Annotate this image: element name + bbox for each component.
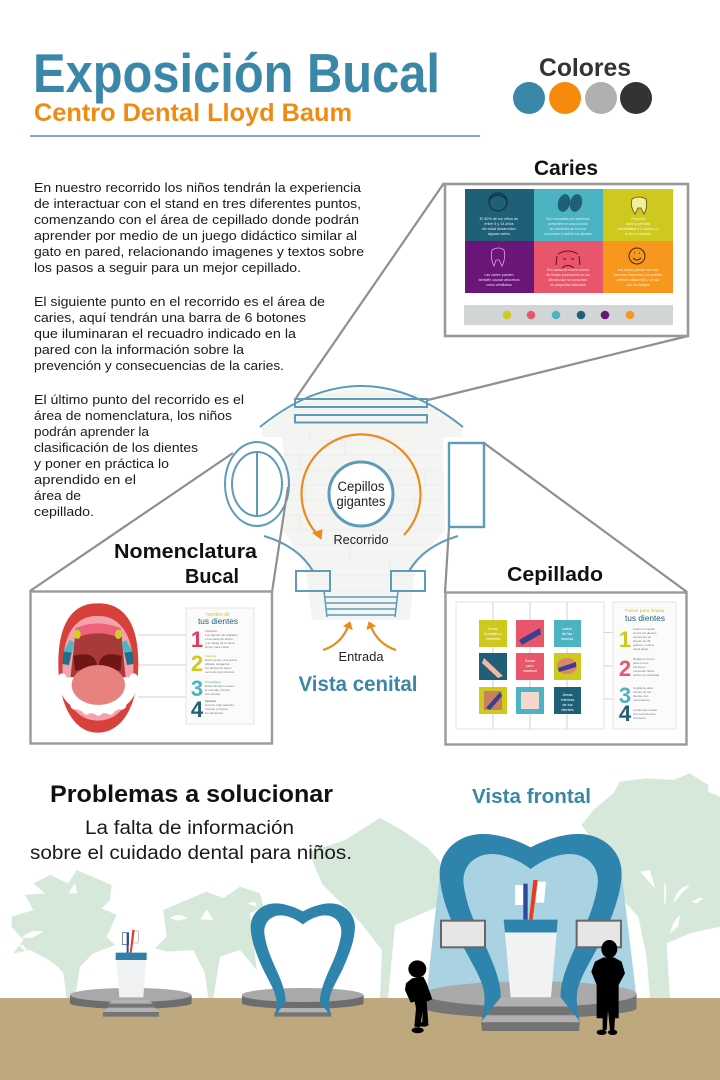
caries card: pink: [534, 241, 603, 293]
text: problema: [30, 818, 352, 864]
caries card: yellow: lo frío o caliente: [625, 232, 651, 236]
card: pasos para limpiar tus dientes: inferiores: [633, 665, 646, 669]
game board: Áreas: [488, 627, 498, 631]
card: pasos para limpiar tus dientes: 2: [619, 656, 631, 681]
caries card: pink: de fiestas provocando en los: [546, 273, 590, 277]
arrows: entrada: [323, 622, 396, 650]
stage 3: frontal tooth stand: [405, 834, 637, 1035]
card: tus dientes: y de abajo de la boca: [205, 641, 235, 645]
card: pasos para limpiar tus dientes: 3: [619, 683, 631, 708]
toothbrushes: [515, 880, 546, 920]
game board: Áreas: [563, 693, 573, 697]
intro text: El siguiente punto en el recorrido es el área de: [34, 294, 325, 309]
card: tus dientes: Caninos: [205, 654, 217, 658]
game board: Áreas: [525, 659, 535, 663]
card: tus dientes: Incisivos: [205, 629, 217, 633]
card: tus dientes: los alimentos duros: [205, 666, 232, 670]
card: pasos para limpiar tus dientes: arriba con suavidad: [633, 673, 660, 677]
floor plan: vista cenital: [225, 386, 484, 696]
intro text: área de: [34, 488, 81, 503]
caries card: teal: [534, 189, 603, 241]
ground: [0, 998, 720, 1080]
blue tooth arch: [440, 834, 622, 1022]
heading: problemas a solucionar: Problemas a solucionar: [50, 781, 333, 808]
label: entrada: Entrada: [338, 649, 384, 664]
heading: nomenclatura bucal: [114, 540, 258, 588]
text: problema: sobre el cuidado dental para niños.: [30, 843, 352, 864]
heading: nomenclatura bucal: Bucal: [185, 565, 239, 588]
card: pasos para limpiar tus dientes: interior de los: [633, 690, 652, 694]
intro text: aprender por medio de un juego didáctico similar al: [34, 228, 357, 243]
card: pasos para limpiar tus dientes: dientes con: [633, 694, 649, 698]
card: tus dientes: dos puntas: [205, 692, 221, 696]
card: tus dientes: Estos tienen una punta: [205, 658, 237, 662]
card: tus dientes: Molares: [205, 699, 216, 703]
colour palette: [513, 54, 652, 114]
card: tus dientes: 1: [191, 627, 203, 652]
game board: masticar: [523, 669, 538, 673]
card: tus dientes: afilada, desgarran: [205, 662, 230, 666]
intro text: pared con la información sobre la: [34, 342, 245, 357]
caries card: yellow: dolor y pérdida: [626, 222, 650, 226]
caries card: orange: [603, 241, 673, 293]
steps: [481, 997, 580, 1031]
caries card: purple: [465, 241, 534, 293]
card: pasos para limpiar tus dientes: contra los dientes: [633, 631, 657, 635]
caries card: teal: Son causadas por bacterias: [546, 217, 590, 221]
game board: [456, 602, 613, 729]
connectors: [138, 635, 186, 697]
central giant brushes circle: gigantes: [336, 494, 386, 509]
intro text: que iluminaran el recuadro indicado en la: [34, 326, 297, 341]
card: tus dientes: cerca de los incisivos: [205, 670, 235, 674]
intro text: El último punto del recorrido es el: [34, 392, 244, 407]
intro text: [34, 180, 364, 519]
card: pasos para limpiar tus dientes: paso en los: [633, 661, 649, 665]
stage 2: tooth arch on platform: [242, 903, 364, 1017]
heading: cepillado: Cepillado: [507, 563, 603, 586]
card: tus dientes: sirven para cortar: [205, 645, 229, 649]
caries card: orange: prevenir utilizar hilo y ceniza: [617, 278, 659, 282]
game board: para: [526, 664, 535, 668]
card: tus dientes: muelen y trituran: [205, 707, 228, 711]
intro text: de interactuar con el stand en tres diferentes puntos,: [34, 196, 361, 211]
caries card: dark blue: entre 5 y 14 años: [484, 222, 514, 226]
intro text: los pasos a seguir para un mejor cepillado.: [34, 260, 301, 275]
colour palette: Colores: [539, 54, 631, 82]
silhouette: child with backpack: [405, 960, 432, 1033]
card: pasos para limpiar tus dientes: Cepilla la parte: [633, 686, 653, 690]
game board: internas: [561, 698, 574, 702]
game board: frontales y: [484, 632, 502, 636]
card: pasos para limpiar tus dientes: moviendo hacia: [633, 669, 654, 673]
icon: open mouth: [58, 603, 138, 733]
intro text: aprendido en el: [34, 472, 136, 487]
panel: caries: [296, 157, 688, 400]
card: pasos para limpiar tus dientes: hacia abajo: [633, 647, 649, 651]
caries card: teal: las bacterias de la boca: [550, 227, 586, 231]
card: pasos para limpiar tus dientes: con movimientos: [633, 712, 656, 716]
intro text: y poner en práctica lo: [34, 456, 169, 471]
intro text: podrán aprender la: [34, 424, 150, 439]
game board: Lados: [562, 627, 572, 631]
panel: nomenclatura bucal: [30, 453, 288, 744]
silhouette: child standing: [591, 940, 625, 1035]
central giant brushes circle: Cepillos: [338, 479, 385, 494]
arrow: recorrido: [301, 434, 420, 539]
central giant brushes circle: [329, 462, 393, 526]
card: tus dientes: Los dientes de adelante: [205, 633, 238, 637]
card: tus dientes: los alimentos: [205, 711, 224, 715]
game board: externas: [486, 637, 500, 641]
card: pasos para limpiar tus dientes: Pasos para limpiar: [625, 608, 665, 614]
card: tus dientes: nombre de: [206, 612, 230, 618]
game board: de tus: [562, 703, 573, 707]
plan outline: [225, 386, 484, 617]
card: pasos para limpiar tus dientes: Coloca el cepillo: [633, 627, 655, 631]
card: pasos para limpiar tus dientes: grados y mueve: [633, 643, 655, 647]
caries card: yellow: Provoca: [631, 217, 645, 221]
caries card: teal: presentes en una comida: [548, 222, 588, 226]
game board: de las: [562, 632, 572, 636]
intro text: caries, aquí tendrán una barra de 6 botones: [34, 310, 306, 325]
intro text: En nuestro recorrido los niños tendrán la experiencia: [34, 180, 362, 195]
section: trees background: [12, 773, 720, 999]
caries card: teal: consumen y dañan los dientes: [544, 232, 592, 236]
card: tus dientes: 3: [191, 676, 203, 701]
card: pasos para limpiar tus dientes: ángulo de 45: [633, 639, 651, 643]
card: tus dientes: [186, 608, 254, 724]
subtitle: Centro Dental Lloyd Baum: [34, 99, 352, 127]
card: tus dientes: la comida y tienen: [205, 688, 230, 692]
card: tus dientes: Son los más grandes: [205, 703, 235, 707]
card: tus dientes: Estos dientes muelen: [205, 684, 235, 688]
intro text: prevención y consecuencias de la caries.: [34, 358, 284, 373]
card: pasos para limpiar tus dientes: Repite el mismo: [633, 657, 655, 661]
panel: cepillado: [445, 443, 687, 744]
caries card: pink: en pequeñas adiciones: [551, 283, 586, 287]
intro text: área de nomenclatura, los niños: [34, 408, 232, 423]
caries card: dark blue: de edad desarrollan: [482, 227, 516, 231]
button bar: [464, 305, 673, 325]
stage 1: cup on platform: [70, 930, 192, 1017]
caries card: orange: Las caries pueden ser muy: [618, 268, 659, 272]
card: tus dientes: en la parte de arriba: [205, 637, 233, 641]
card: tus dientes: 2: [191, 651, 203, 676]
intro text: cepillado.: [34, 504, 94, 519]
text: problema: La falta de información: [85, 818, 294, 839]
caries card: dark blue: [465, 189, 534, 241]
caries card: dark blue: El 60% de los niños de: [480, 217, 518, 221]
heading: vista frontal: Vista frontal: [472, 786, 591, 808]
caries card: pink: dientes que se consumen: [549, 278, 587, 282]
caries card: orange: son muy dolorosas y se pueden: [614, 273, 662, 277]
caries card: dark blue: alguna caries: [488, 232, 510, 236]
card: pasos para limpiar tus dientes: movimientos: [633, 698, 650, 702]
card: pasos para limpiar tus dientes: 1: [619, 627, 631, 652]
caries card: purple: también causar abscesos: [479, 278, 520, 282]
label: recorrido: Recorrido: [334, 532, 388, 547]
card: pasos para limpiar tus dientes: circulares: [633, 716, 646, 720]
heading: caries: Caries: [534, 157, 598, 180]
card: tus dientes: 4: [191, 697, 204, 722]
card: pasos para limpiar tus dientes: [613, 602, 676, 729]
card: pasos para limpiar tus dientes: superiores en: [633, 635, 652, 639]
title: Exposición Bucal: [33, 42, 440, 104]
caries card: pink: Son causa de estrés crónico: [547, 268, 589, 272]
caries card: orange: con tus amigos: [627, 283, 650, 287]
heading: nomenclatura bucal: Nomenclatura: [114, 540, 258, 563]
caries card: yellow: sensibilidad a lo dulce y a: [618, 227, 658, 231]
cup: [504, 920, 558, 997]
intro text: clasificación de los dientes: [34, 440, 198, 455]
caries card: yellow: [603, 189, 673, 241]
intro text: comenzando con el área de cepillado donde podrán: [34, 212, 359, 227]
label: vista cenital: Vista cenital: [298, 673, 418, 696]
card: tus dientes: Premolares: [205, 680, 221, 684]
caries card: purple: como ventilados: [486, 283, 512, 287]
card: pasos para limpiar tus dientes: Limpia las muelas: [633, 708, 658, 712]
game board: muelas: [561, 637, 573, 641]
game board: dientes: [561, 708, 574, 712]
card: pasos para limpiar tus dientes: tus dientes: [625, 614, 665, 623]
caries card: purple: Las caries pueden: [484, 273, 514, 277]
intro text: gato en pared, relacionando imagenes y textos sobre: [34, 244, 364, 259]
side screens: [441, 921, 621, 947]
card: tus dientes: tus dientes: [198, 617, 238, 626]
card: pasos para limpiar tus dientes: 4: [619, 701, 632, 726]
